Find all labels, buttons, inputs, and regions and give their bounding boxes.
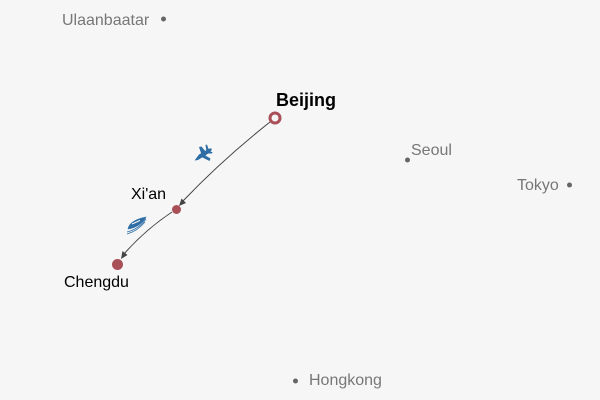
city: Hongkong: Hongkong [309,372,382,389]
icon: airplane [194,144,212,161]
marker: Xi'an: Xi'an [131,186,166,203]
city: Tokyo: Tokyo [517,177,559,194]
arrow: Xi'an to Chengdu [121,212,172,259]
city: Seoul: Seoul [411,142,452,159]
city: Ulaanbaatar: Ulaanbaatar [62,12,150,29]
marker: Xi'an [131,186,181,214]
marker: Beijing [270,90,336,123]
arrow: Beijing to Xi'an [179,122,270,206]
marker: Beijing: Beijing [276,90,336,110]
icon: train [127,217,146,234]
marker: Chengdu [64,259,129,291]
marker: Chengdu: Chengdu [64,274,129,291]
